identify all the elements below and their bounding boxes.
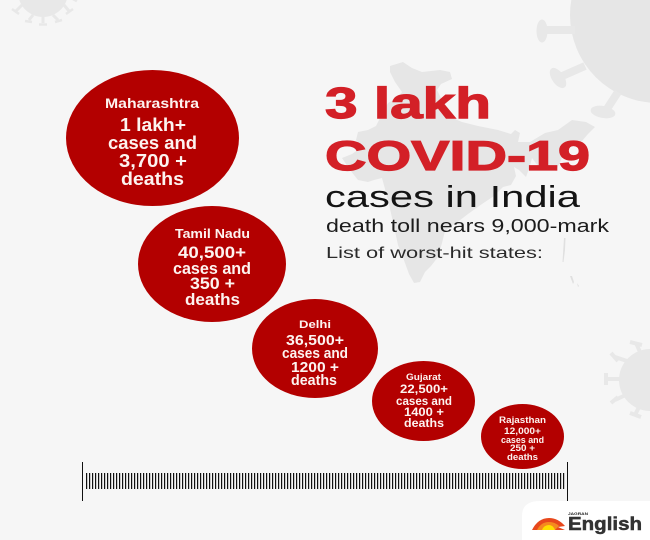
bubble: Gujarat: deaths [404,416,444,430]
bubble: Rajasthan [481,404,564,469]
bubble: Tamil Nadu: cases and [173,260,251,278]
logo text: English: English [568,514,642,534]
logo text: JAGRAN: JAGRAN [568,511,588,516]
bubble: Gujarat [372,361,475,441]
bubble: Delhi: Delhi [299,319,331,331]
bubble: Delhi: deaths [291,373,337,389]
bubble: Rajasthan: deaths [507,452,538,462]
bubble: Gujarat: 22,500+ [400,382,448,396]
icon: virus top-left [12,0,77,24]
bubble: Tamil Nadu: Tamil Nadu [175,226,250,241]
bubble: Delhi: cases and [282,346,348,362]
title line: COVID-19: COVID-19 [325,132,590,179]
bubble: Maharashtra: 1 lakh+ [120,114,186,135]
subtitle: list: List of worst-hit states: [326,245,543,262]
icon: virus right [606,342,650,417]
ruler timeline [82,462,568,501]
bubble: Delhi: 36,500+ [286,333,344,349]
map: Andaman islands [562,238,579,287]
bubble: Tamil Nadu: 40,500+ [178,244,246,262]
bubble: Gujarat: 1400 + [404,405,444,419]
bubble: Rajasthan: Rajasthan [499,415,546,425]
bubble: Tamil Nadu: 350 + [190,275,235,293]
map of India [342,62,595,283]
subtitle: cases in India: cases in India [325,179,581,214]
bubble: Rajasthan: cases and [501,435,544,445]
bubble: Maharashtra: 3,700 + [119,150,187,171]
bubble: Delhi [252,299,378,398]
bubble: Maharashtra: Maharashtra [105,95,199,111]
bubble: Tamil Nadu [138,206,286,322]
bubble: Maharashtra: cases and [108,132,197,153]
bubble: Maharashtra [66,70,239,206]
title line: 3 lakh: 3 lakh [325,79,491,128]
icon: virus top-right [537,0,650,120]
bubble: Gujarat: cases and [396,394,452,408]
bubble: Tamil Nadu: deaths [185,291,240,309]
logo panel [522,501,650,540]
bubble: Gujarat: Gujarat [406,372,442,383]
subtitle: death toll: death toll nears 9,000-mark [326,216,610,236]
icon: rising sun logo [532,518,565,530]
title [325,79,610,262]
bubble: Maharashtra: deaths [121,168,184,189]
bubble: Delhi: 1200 + [291,360,339,376]
bubble: Rajasthan: 250 + [510,443,535,453]
bubble: Rajasthan: 12,000+ [504,426,541,436]
